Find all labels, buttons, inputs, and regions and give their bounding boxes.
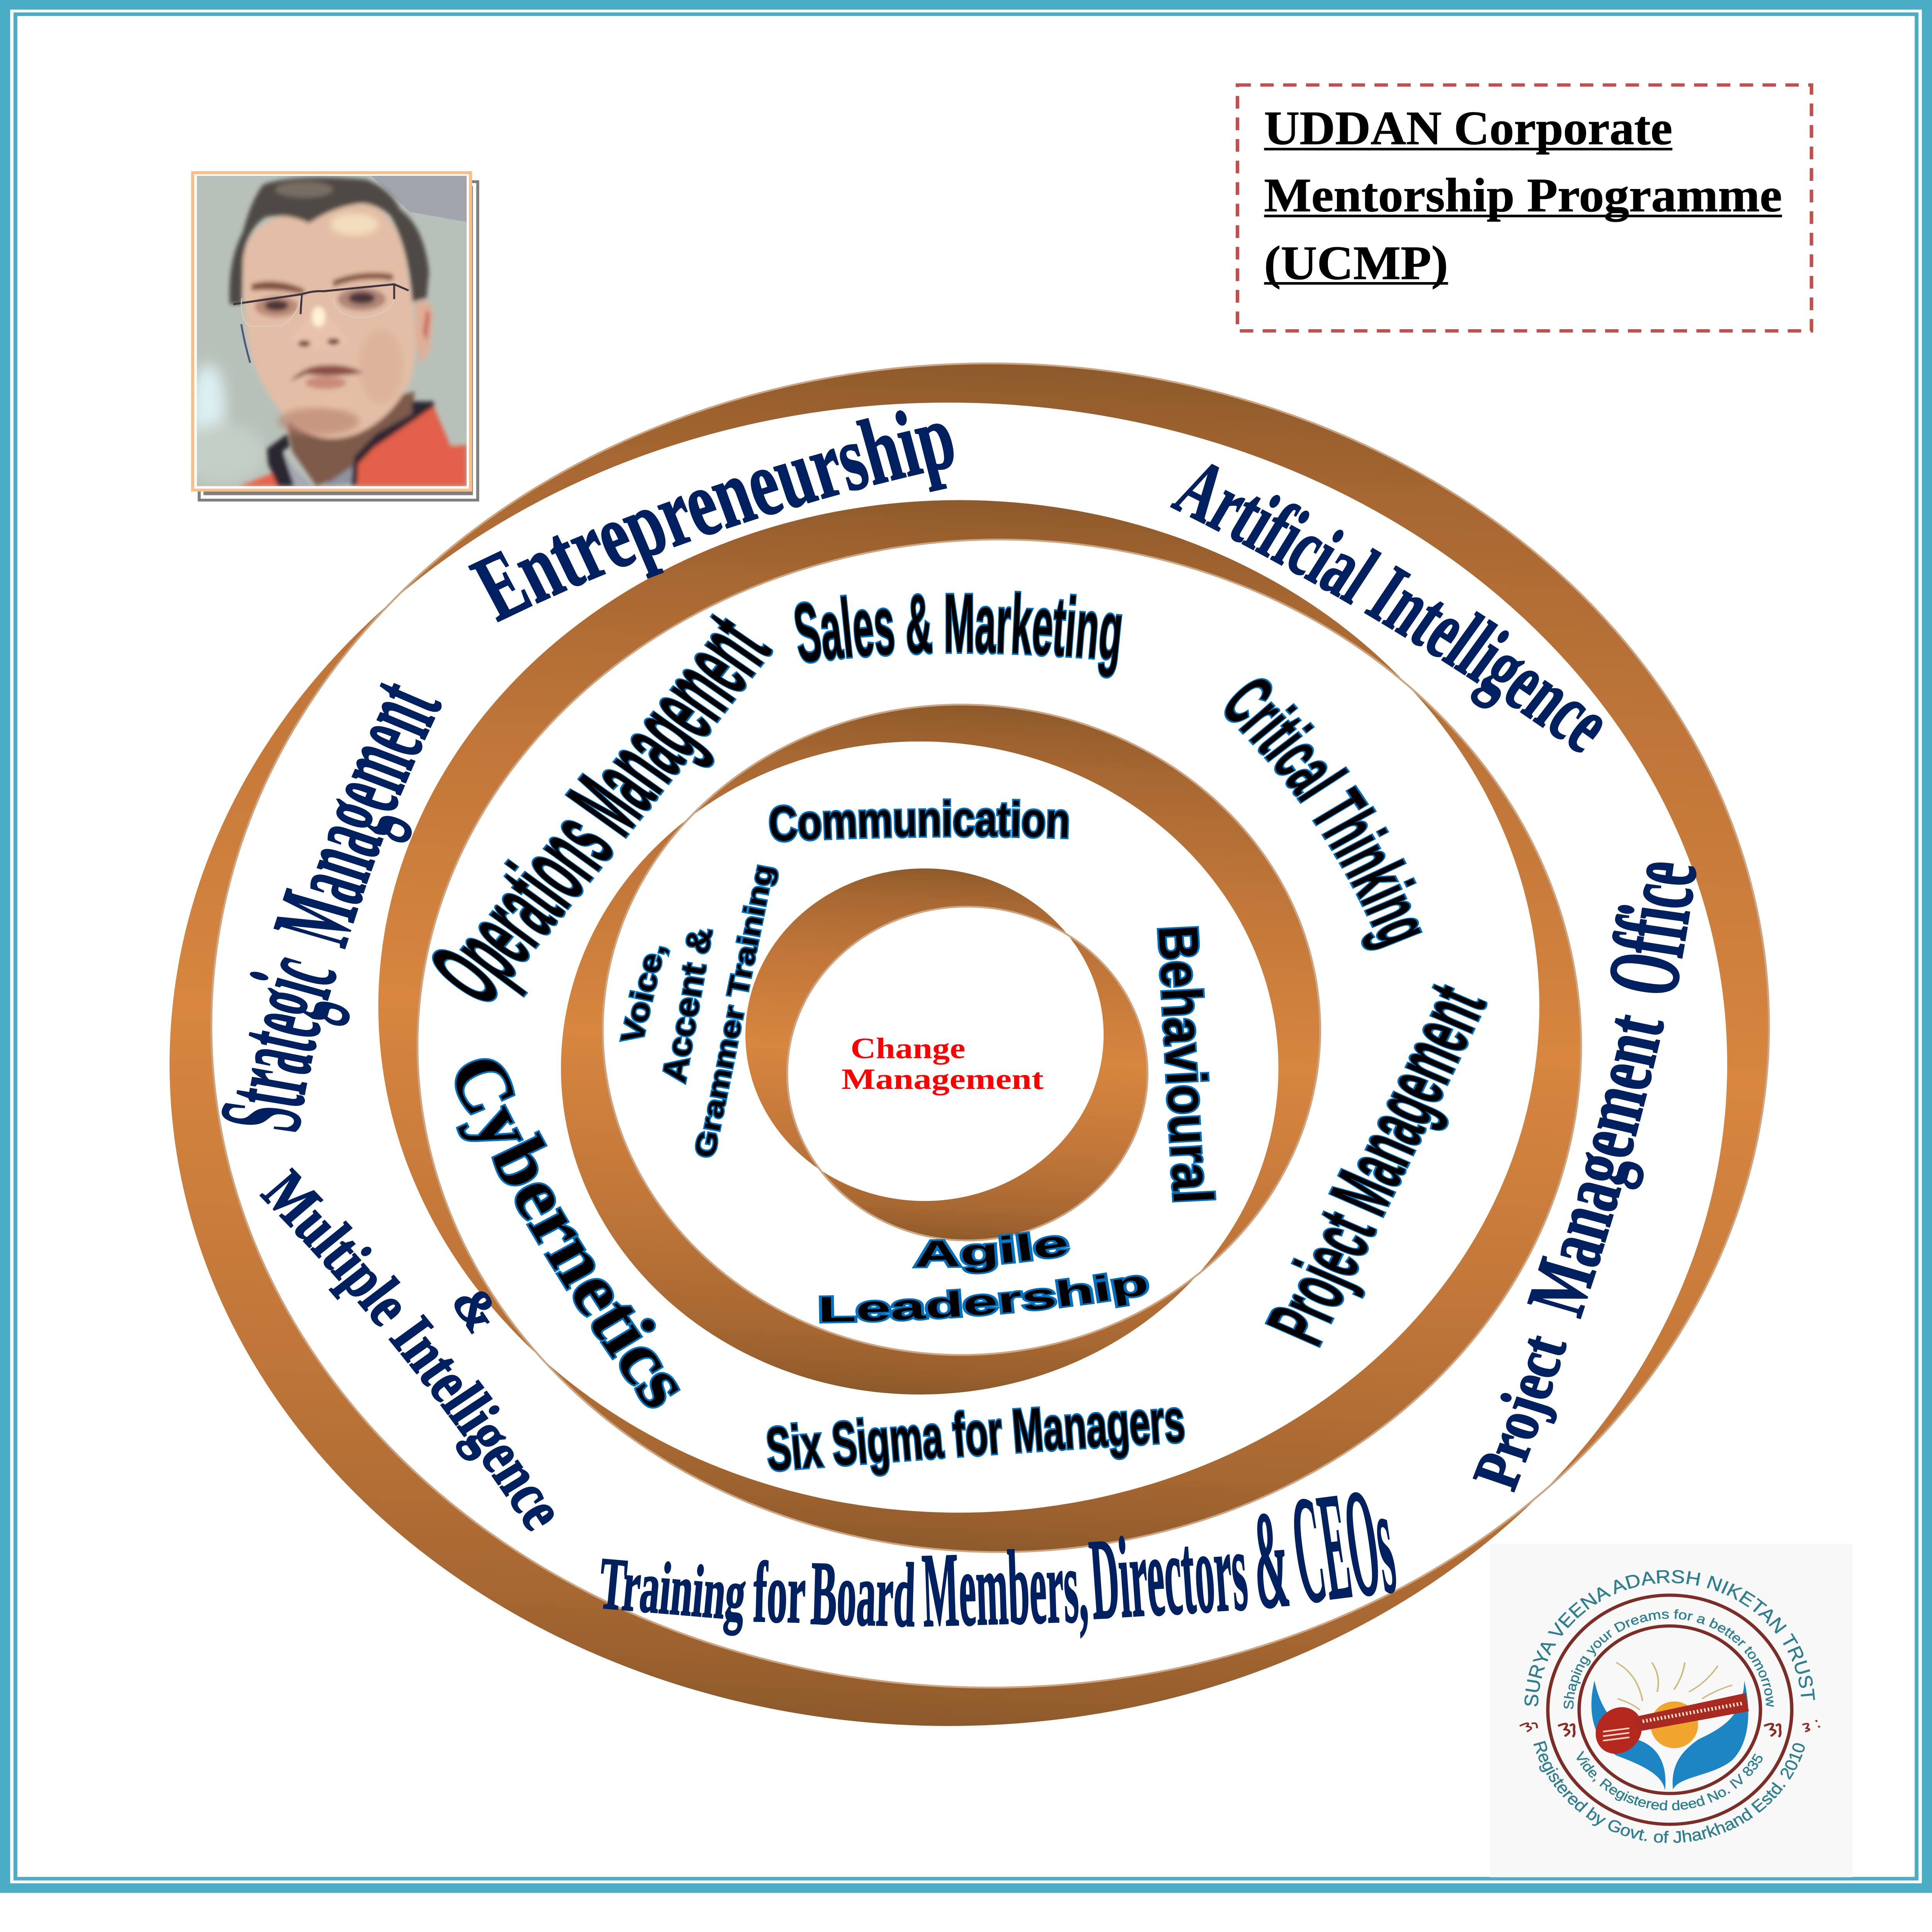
label: Six Sigma for Managers: Six Sigma for Managers <box>763 1386 1187 1484</box>
title text: (UCMP) <box>1264 236 1448 289</box>
label: Project Management Office: Project <box>1459 1327 1580 1497</box>
label: Voice, Accent & Grammer Training: Grammer Training <box>689 862 780 1160</box>
label: Agile Leadership: Agile <box>914 1221 1071 1274</box>
dashed border <box>1238 85 1811 331</box>
logo text: Vide, Registered deed No. IV 835 <box>1571 1749 1767 1813</box>
label: Sales & Marketing: Sales & Marketing <box>789 577 1127 680</box>
ring: outer <box>170 363 1769 1726</box>
label: Strategic Management: Strategic <box>194 942 361 1138</box>
logo text: Registered by Govt. of Jharkhand Estd. 2010 <box>1529 1739 1810 1847</box>
label: Training for Board Members, Directors & CEOs: Training <box>596 1542 749 1636</box>
title box <box>1238 85 1811 331</box>
outer ring labels <box>194 383 1718 1649</box>
logo: Surya Veena Adarsh Niketan Trust <box>1490 1543 1852 1877</box>
ring: third <box>378 500 1581 1552</box>
centre label: Change Management: Change <box>850 1032 965 1065</box>
logo rings <box>1548 1595 1792 1824</box>
label: Training for Board Members, Directors & CEOs: CEOs <box>1283 1454 1403 1636</box>
label: Training for Board Members, Directors & CEOs: Board <box>810 1542 917 1646</box>
om symbols <box>1520 1720 1820 1737</box>
label: Training for Board Members, Directors & CEOs: Members, <box>920 1527 1090 1649</box>
concentric rings <box>170 363 1769 1726</box>
photo frame with portrait <box>179 173 478 500</box>
label: Strategic Management <box>194 663 464 1138</box>
label: Agile Leadership <box>818 1221 1152 1330</box>
label: Training for Board Members, Directors & CEOs: & <box>1248 1481 1294 1638</box>
label: Entrepreneurship: Entrepreneurship <box>457 383 964 640</box>
label: Project Management Office: Management <box>1509 1007 1682 1325</box>
portrait photo <box>179 176 467 486</box>
logo text: SURYA VEENA ADARSH NIKETAN TRUST <box>1520 1566 1819 1708</box>
logo background <box>1490 1543 1852 1877</box>
ring: second <box>561 704 1320 1395</box>
title text: UDDAN Corporate <box>1264 101 1672 155</box>
label: Training for Board Members, Directors & CEOs <box>596 1454 1403 1649</box>
veena <box>1588 1693 1749 1759</box>
label: Operations Management: Operations Management <box>408 596 791 1022</box>
label: ampersand: & <box>440 1277 512 1341</box>
label: Voice, Accent & Grammer Training: Accent & <box>655 925 720 1085</box>
title text: Mentorship Programme <box>1264 168 1782 222</box>
centre label: Change Management <box>842 1032 1044 1096</box>
label: Voice, Accent & Grammer Training: Voice, <box>614 940 672 1046</box>
label: Project Management: Project Management <box>1249 973 1503 1356</box>
label: Artificial Intelligence: Artificial Intelligence <box>1161 441 1629 769</box>
third ring labels <box>408 577 1503 1484</box>
orange frame <box>193 173 471 490</box>
label: Critical Thinking: Critical Thinking <box>1207 662 1449 956</box>
rays <box>1616 1662 1732 1710</box>
label: Voice, Accent & Grammer Training <box>614 862 780 1160</box>
ring: inner <box>745 868 1148 1240</box>
label: Project Management Office <box>1459 855 1718 1497</box>
title text <box>1264 101 1782 289</box>
label: Agile Leadership: Leadership <box>818 1262 1152 1330</box>
leaves <box>1592 1680 1748 1791</box>
label: Cybernetics: Cybernetics <box>432 1042 709 1422</box>
label: Training for Board Members, Directors & CEOs: Directors <box>1086 1506 1251 1644</box>
sun <box>1651 1701 1698 1748</box>
label: Communication: Communication <box>767 791 1071 852</box>
label: Strategic Management: Management <box>249 663 464 956</box>
label: Training for Board Members, Directors & CEOs: for <box>752 1544 807 1641</box>
logo artwork <box>1520 1662 1820 1791</box>
photo shadow frame <box>199 182 478 500</box>
logo text <box>1520 1566 1819 1847</box>
label: Project Management Office: Office <box>1585 855 1718 1003</box>
label: Multiple Intelligence: Multiple Intelligence <box>249 1158 580 1540</box>
label: Behavioural: Behavioural <box>1146 924 1225 1205</box>
centre label: Change Management: Management <box>842 1063 1044 1096</box>
second ring labels <box>614 791 1225 1330</box>
logo text: Shaping your Dreams for a better tomorrow <box>1561 1607 1779 1710</box>
